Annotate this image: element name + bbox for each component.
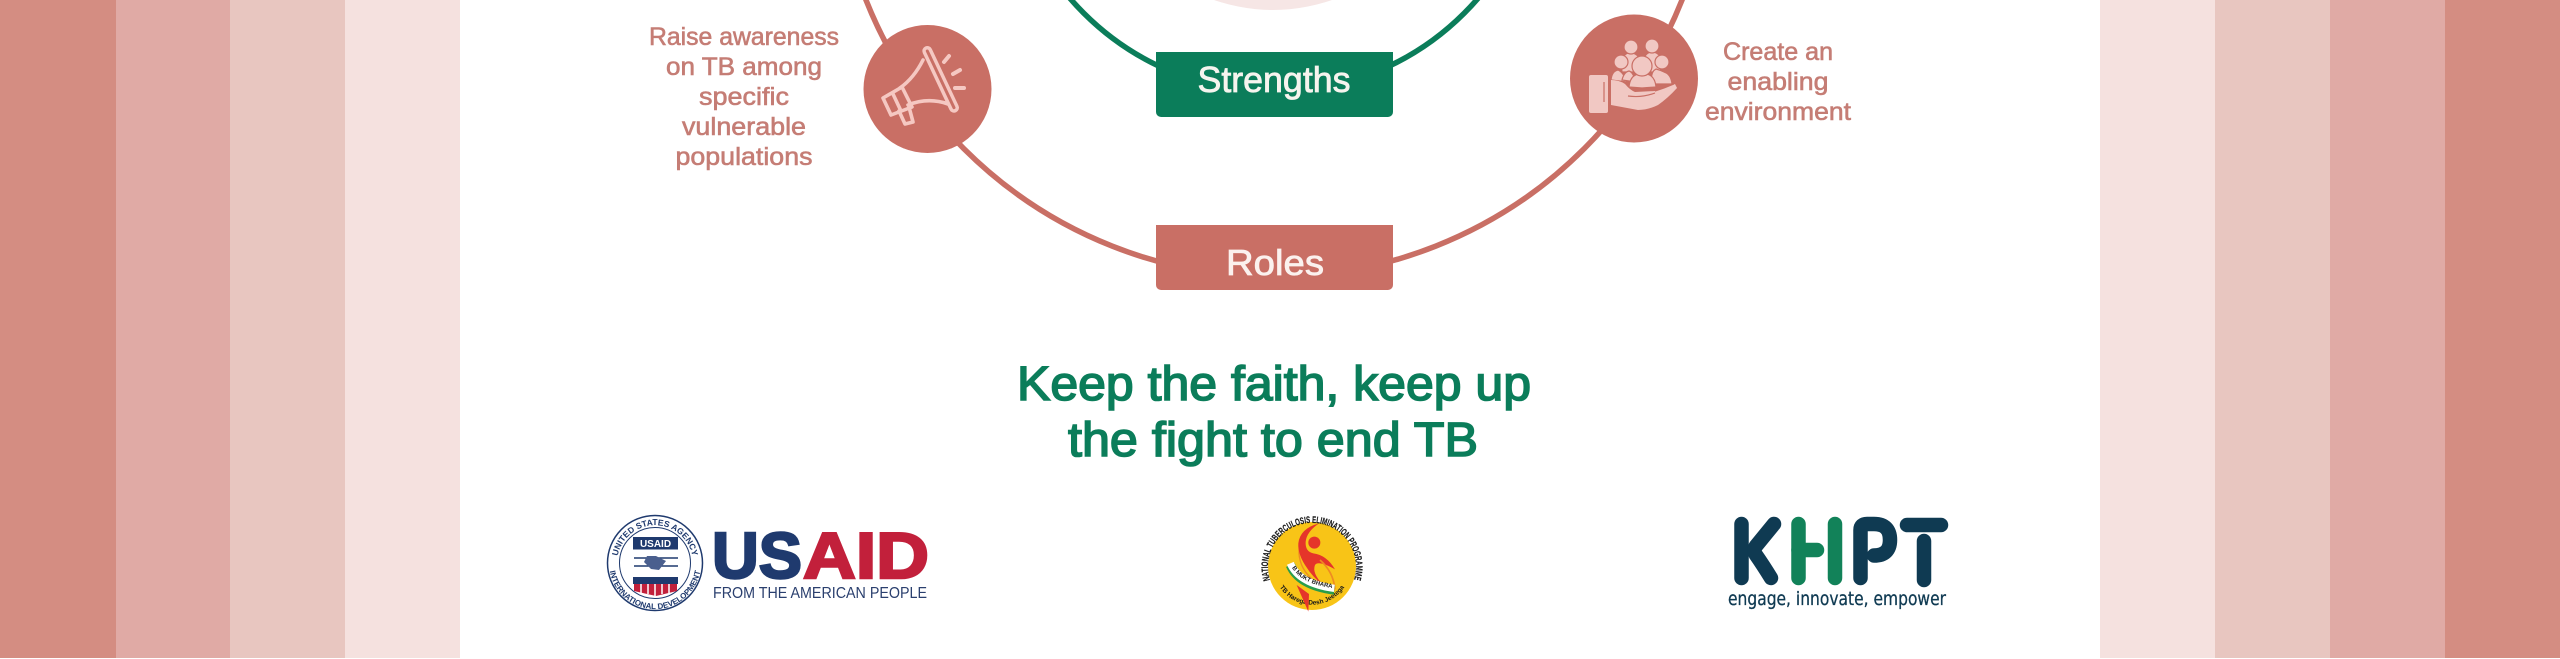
text: raise awareness <box>649 23 839 171</box>
logo: National TB Elimination Programme: TB MUKT BHARAT <box>1292 566 1332 588</box>
KHPT letter marks <box>1742 524 1941 580</box>
USAID wordmark: US <box>712 519 802 592</box>
right decorative stripes <box>2100 0 2560 658</box>
text: raise awareness: Raise awareness <box>649 23 839 51</box>
centre pale circle <box>1094 0 1452 10</box>
strengths label <box>1156 52 1393 117</box>
roles label <box>1156 225 1393 290</box>
text: create an enabling environment: Create an <box>1723 38 1833 66</box>
strengths ring <box>1005 0 1543 92</box>
text: create an enabling environment <box>1705 38 1851 126</box>
USAID tagline: FROM THE AMERICAN PEOPLE <box>713 585 927 602</box>
icon: megaphone <box>864 25 992 153</box>
icon: hand holding people <box>1570 14 1698 142</box>
closing message <box>1017 358 1531 467</box>
text: raise awareness: specific <box>699 83 789 111</box>
text: create an enabling environment: enabling <box>1728 68 1828 96</box>
strengths label: Strengths <box>1198 59 1350 100</box>
USAID seal <box>606 514 704 612</box>
USAID seal: INTERNATIONAL DEVELOPMENT <box>610 570 700 610</box>
closing message: the fight to end TB <box>1068 414 1478 467</box>
closing message: Keep the faith, keep up <box>1017 358 1531 411</box>
text: raise awareness: on TB among <box>666 53 822 81</box>
text: raise awareness: vulnerable <box>682 113 806 141</box>
USAID seal: UNITED STATES AGENCY <box>612 519 698 556</box>
logo: USAID: AID <box>803 519 929 592</box>
left decorative stripes <box>0 0 460 658</box>
logo: KHPT <box>1728 524 1946 610</box>
KHPT tagline: engage, innovate, empower <box>1728 588 1946 610</box>
logo: National TB Elimination Programme: NATIONAL TUBERCULOSIS ELIMINATION PROGRAMME <box>1261 516 1363 582</box>
roles label: Roles <box>1226 242 1324 283</box>
logo: USAID <box>606 514 929 612</box>
text: raise awareness: populations <box>676 143 812 171</box>
logo: National TB Elimination Programme <box>1261 516 1363 612</box>
logo: National TB Elimination Programme: TB Harega Desh Jeetega <box>1280 584 1344 605</box>
roles ring <box>835 0 1713 277</box>
text: create an enabling environment: environment <box>1705 98 1851 126</box>
USAID seal: USAID <box>640 539 671 550</box>
